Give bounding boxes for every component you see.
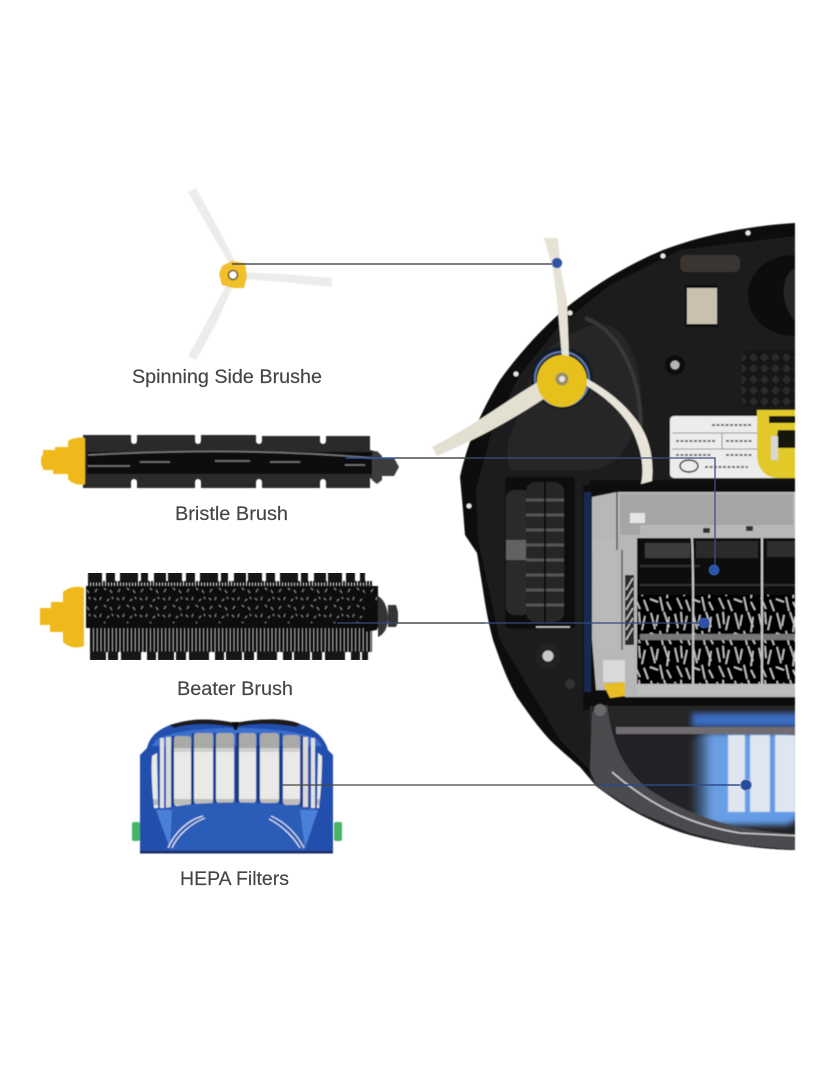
rim screws	[466, 230, 752, 510]
yellow clip	[757, 410, 795, 478]
part: HEPA filter	[132, 719, 342, 854]
side tabs	[132, 822, 140, 841]
dust bin	[590, 704, 802, 860]
screw centre	[665, 355, 685, 375]
lower screws	[542, 650, 575, 689]
yellow gear end	[41, 438, 85, 485]
bristle tufts	[86, 577, 378, 656]
roller window with bristles	[637, 595, 797, 635]
cleaning head black frame	[584, 485, 623, 710]
lower blue panel	[156, 802, 318, 850]
yellow gear end	[40, 587, 84, 647]
yellow hub	[219, 261, 247, 288]
roller window with rubber brush	[639, 540, 796, 590]
robot body shell	[460, 223, 795, 850]
filter frame	[140, 719, 333, 853]
textured tile	[742, 354, 795, 406]
wheel	[505, 477, 575, 629]
rating label	[669, 415, 777, 479]
side brush mounted on robot	[432, 238, 652, 484]
wire guards	[692, 538, 762, 684]
wheel opening	[748, 255, 795, 336]
label: HEPA Filters: HEPA Filters	[180, 869, 289, 890]
rubber roller body	[83, 435, 378, 488]
callout: side brush line	[232, 258, 562, 268]
label: Bristle Brush: Bristle Brush	[175, 504, 288, 525]
icon: sensor pad	[685, 285, 718, 327]
robot interior details	[476, 236, 802, 860]
gray cleaning head housing	[592, 492, 800, 697]
robot vacuum underside	[432, 223, 802, 860]
yellow latch	[603, 682, 625, 698]
callout: bristle brush line	[346, 458, 720, 576]
callout: HEPA filter line	[282, 780, 752, 790]
pleats	[152, 753, 158, 808]
part: bristle brush	[41, 435, 399, 488]
head lower strip	[637, 684, 797, 695]
end cap	[378, 596, 398, 637]
label: Beater Brush: Beater Brush	[177, 679, 293, 700]
callout: beater brush line	[337, 618, 710, 628]
part: spinning side brush	[188, 188, 332, 360]
end cap	[372, 451, 399, 484]
label: Spinning Side Brushe: Spinning Side Brushe	[132, 367, 322, 388]
part: beater brush	[40, 577, 398, 656]
